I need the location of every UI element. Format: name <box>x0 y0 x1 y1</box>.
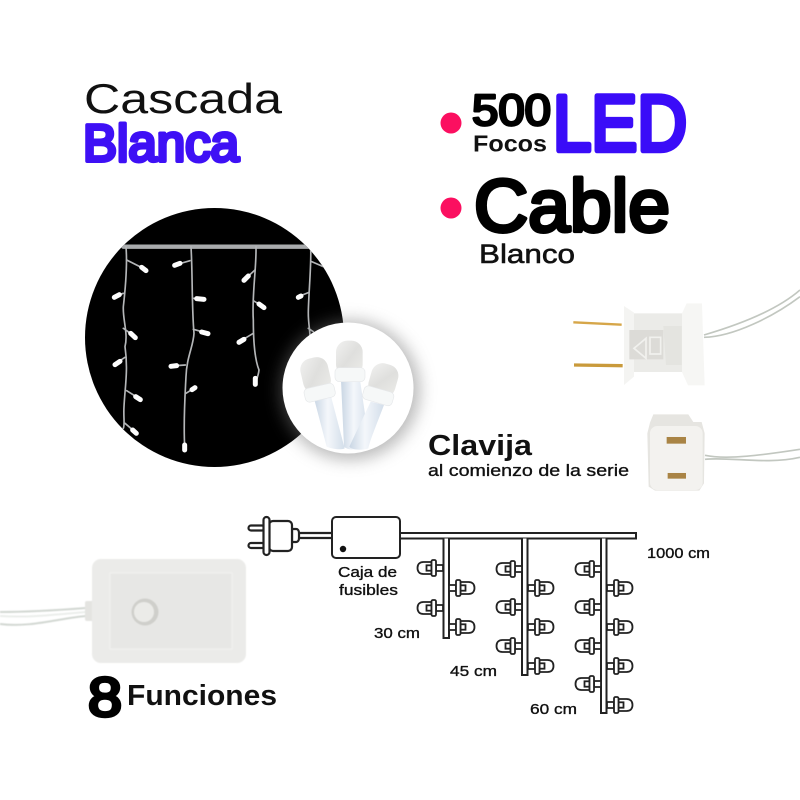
photo: white socket connector <box>647 414 800 491</box>
clavija caption: Clavija <box>428 430 533 462</box>
branch 60 cm <box>576 538 632 713</box>
diagram labels <box>338 545 710 718</box>
branch 45 cm <box>496 538 554 675</box>
label: 8 funciones: Funciones <box>127 680 277 712</box>
controller wires <box>0 608 86 625</box>
feature: 500 focos LED: Focos <box>473 130 547 156</box>
socket wires <box>705 449 800 461</box>
feature: 500 focos LED: 500 <box>472 86 551 135</box>
feature: 500 focos LED <box>440 78 687 168</box>
feature: 500 focos LED: LED <box>553 78 687 168</box>
feature: cable blanco: Cable <box>474 164 670 248</box>
plug wires <box>704 290 800 337</box>
title: Cascada Blanca: Cascada <box>84 75 283 122</box>
main wire <box>400 533 636 538</box>
fuse box <box>332 517 400 558</box>
diagram: wiring schematic <box>248 517 710 718</box>
diagram labels: fusibles <box>339 582 398 599</box>
clavija caption: al comienzo de la serie <box>428 461 629 480</box>
icon: power plug <box>248 517 332 555</box>
diagram labels: 60 cm <box>530 701 577 718</box>
clavija caption <box>428 430 629 480</box>
diagram labels: 30 cm <box>374 625 420 642</box>
diagram labels: Caja de <box>338 564 397 581</box>
branch 30 cm <box>418 538 474 638</box>
title: Cascada Blanca <box>83 75 283 173</box>
feature: cable blanco <box>440 164 670 269</box>
infographic canvas <box>0 82 800 718</box>
feature: cable blanco: Blanco <box>479 239 575 269</box>
title: Cascada Blanca: Blanca <box>83 115 239 173</box>
diagram labels: 1000 cm <box>647 545 710 562</box>
photo inset: three LED bulbs close-up <box>280 320 420 460</box>
diagram labels: 45 cm <box>450 663 497 680</box>
photo: white plug with gold prongs <box>573 290 800 385</box>
photo: lit icicle light strands on black circle <box>85 208 344 467</box>
photo: controller box with button <box>0 559 246 663</box>
label: 8 funciones <box>88 666 277 728</box>
label: 8 funciones: 8 <box>88 666 122 728</box>
